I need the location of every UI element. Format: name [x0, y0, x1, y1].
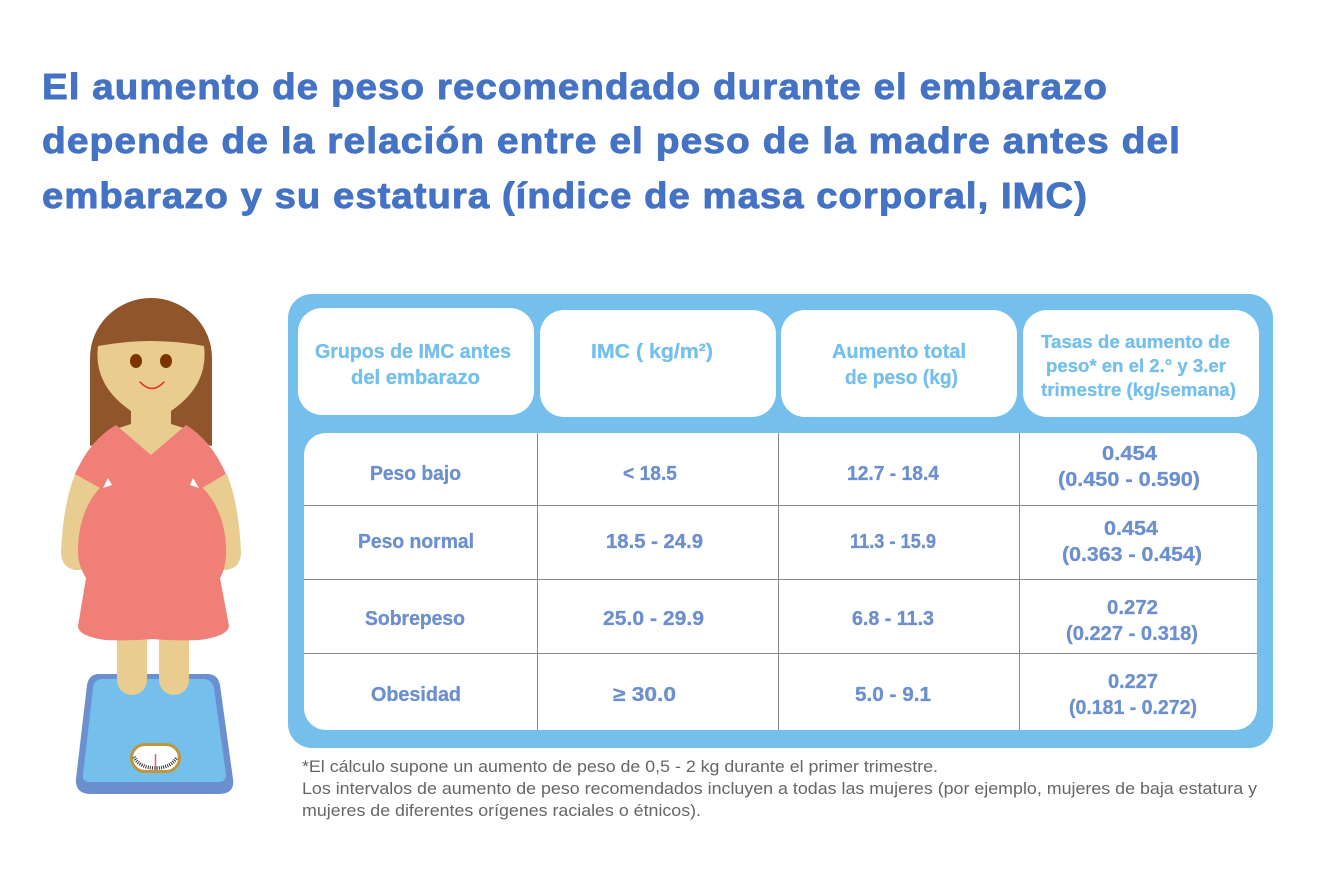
row: peso bajo: 12.7 - 18.4	[847, 463, 940, 485]
header cell: BMI: IMC ( kg/m²)	[591, 341, 713, 363]
row: obesidad: 0.227	[1108, 671, 1158, 693]
row: peso normal: (0.363 - 0.454)	[1062, 544, 1202, 566]
row: sobrepeso: (0.227 - 0.318)	[1066, 623, 1198, 645]
row: peso normal: Peso normal	[358, 531, 474, 553]
row: sobrepeso	[365, 597, 1198, 645]
header cell: gain rate	[1023, 310, 1259, 417]
header cell: groups: del embarazo	[351, 367, 480, 389]
header cell: gain rate: peso* en el 2.° y 3.er	[1046, 355, 1226, 376]
arms	[61, 474, 241, 570]
row: peso bajo: (0.450 - 0.590)	[1058, 469, 1200, 491]
row: peso bajo: < 18.5	[623, 463, 677, 485]
row: peso bajo: Peso bajo	[370, 463, 461, 485]
header cell: total gain: Aumento total	[832, 341, 966, 363]
row: peso normal	[358, 518, 1202, 566]
illustration: pregnant woman on a scale	[61, 298, 241, 794]
header cell: BMI	[540, 310, 776, 417]
armpit gaps	[103, 478, 199, 488]
footnote: Los intervalos de aumento de peso recomendados incluyen a todas las mujeres (por ejemplo, mujeres de baja estatura y	[302, 779, 1258, 798]
hair	[90, 298, 212, 446]
row: obesidad: 5.0 - 9.1	[855, 684, 931, 706]
row: obesidad: Obesidad	[371, 684, 461, 706]
row: peso bajo	[370, 443, 1200, 491]
row: peso normal: 18.5 - 24.9	[606, 531, 703, 553]
header cell: total gain: de peso (kg)	[845, 367, 958, 389]
header cell: groups: Grupos de IMC antes	[315, 341, 511, 363]
legs	[117, 630, 189, 695]
eyes	[130, 354, 172, 368]
row: sobrepeso: 0.272	[1107, 597, 1158, 619]
footnote: *El cálculo supone un aumento de peso de 0,5 - 2 kg durante el primer trimestre.	[302, 757, 938, 776]
table body	[304, 433, 1257, 730]
footnote	[302, 757, 1258, 820]
row: sobrepeso: Sobrepeso	[365, 608, 465, 630]
row: peso bajo: 0.454	[1102, 443, 1158, 465]
header cell: gain rate: trimestre (kg/semana)	[1041, 379, 1236, 400]
row: sobrepeso: 25.0 - 29.9	[603, 608, 704, 630]
title	[42, 66, 1181, 216]
header cell: gain rate: Tasas de aumento de	[1041, 331, 1230, 352]
header cell: groups	[298, 308, 534, 415]
header cell: total gain	[781, 310, 1017, 417]
panel: BMI weight gain table	[288, 294, 1273, 748]
row: sobrepeso: 6.8 - 11.3	[852, 608, 934, 630]
row: obesidad: ≥ 30.0	[613, 684, 676, 706]
icon: bathroom scale	[76, 674, 233, 794]
row: obesidad: (0.181 - 0.272)	[1069, 697, 1197, 719]
face and neck	[97, 341, 205, 460]
footnote: mujeres de diferentes orígenes raciales o étnicos).	[302, 801, 701, 820]
title: embarazo y su estatura (índice de masa corporal, IMC)	[42, 175, 1088, 216]
dress	[75, 425, 229, 640]
title: depende de la relación entre el peso de la madre antes del	[42, 120, 1181, 161]
row: peso normal: 11.3 - 15.9	[850, 531, 936, 553]
smile	[140, 382, 164, 388]
row: peso normal: 0.454	[1104, 518, 1159, 540]
title: El aumento de peso recomendado durante el embarazo	[42, 66, 1108, 107]
row: obesidad	[371, 671, 1197, 719]
